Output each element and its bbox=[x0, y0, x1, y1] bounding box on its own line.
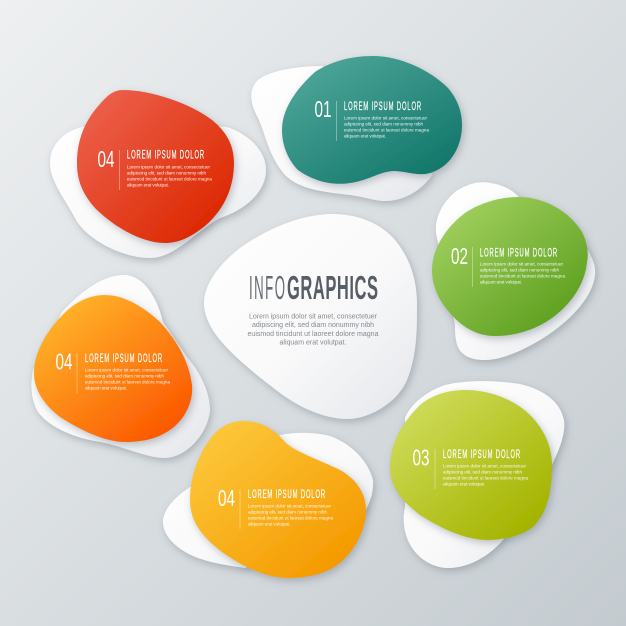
green backing blob bbox=[436, 182, 595, 360]
panel: step 04 yellow bbox=[163, 421, 373, 578]
number 04: 04 bbox=[98, 147, 114, 173]
yellow backing blob bbox=[163, 433, 373, 568]
lime blob bbox=[390, 390, 552, 540]
body text: euismod tincidunt ut laoreet dolore magna bbox=[85, 380, 170, 384]
panel: center title bbox=[204, 214, 417, 419]
panel: step 03 lime bbox=[390, 381, 564, 568]
body text: Lorem ipsum dolor sit amet, consectetuer bbox=[85, 368, 168, 372]
body text: adipiscing elit, sed diam nonummy nibh bbox=[443, 470, 522, 474]
body text bbox=[443, 464, 528, 486]
number 04: 04 bbox=[56, 349, 72, 375]
number 03: 03 bbox=[412, 445, 429, 471]
body text bbox=[344, 116, 429, 138]
title: GRAPHICS bbox=[287, 269, 378, 307]
body text: adipiscing elit, sed diam nonummy nibh bbox=[344, 122, 423, 126]
lime backing blob bbox=[404, 381, 564, 568]
body text: euismod tincidunt ut laoreet dolore magna bbox=[443, 476, 528, 480]
body text: euismod tincidunt ut laoreet dolore magna bbox=[344, 128, 429, 132]
body text: aliquam erat volutpat. bbox=[248, 522, 290, 526]
heading: LOREM IPSUM DOLOR bbox=[344, 100, 421, 114]
heading: LOREM IPSUM DOLOR bbox=[443, 448, 520, 462]
center body text: aliquam erat volutpat. bbox=[280, 340, 347, 346]
body text: adipiscing elit, sed diam nonummy nibh bbox=[85, 374, 164, 378]
body text: Lorem ipsum dolor sit amet, consectetuer bbox=[127, 164, 210, 170]
heading: LOREM IPSUM DOLOR bbox=[248, 488, 325, 502]
number 01: 01 bbox=[314, 97, 331, 123]
body text: aliquam erat volutpat. bbox=[480, 280, 522, 284]
body text bbox=[480, 262, 565, 284]
green blob bbox=[432, 197, 588, 336]
teal blob bbox=[282, 56, 462, 184]
orange backing blob bbox=[31, 275, 210, 458]
body text: Lorem ipsum dolor sit amet, consectetuer bbox=[443, 464, 526, 468]
red blob bbox=[77, 90, 234, 243]
body text bbox=[248, 504, 333, 526]
center body text: Lorem ipsum dolor sit amet, consectetuer bbox=[249, 314, 378, 320]
panel: step 02 green bbox=[432, 182, 595, 360]
number 04: 04 bbox=[218, 486, 235, 512]
title: INFO bbox=[249, 270, 285, 307]
teal backing blob bbox=[251, 66, 433, 201]
center body text: adipiscing elit, sed diam nonummy nibh bbox=[252, 322, 374, 329]
body text: adipiscing elit, sed diam nonummy nibh bbox=[248, 510, 327, 514]
red backing blob bbox=[50, 120, 266, 258]
panel: step 04 red bbox=[50, 90, 266, 258]
body text: euismod tincidunt ut laoreet dolore magna bbox=[127, 176, 212, 182]
body text: Lorem ipsum dolor sit amet, consectetuer bbox=[248, 504, 331, 508]
body text: aliquam erat volutpat. bbox=[85, 386, 127, 390]
body text bbox=[85, 368, 170, 390]
body text: Lorem ipsum dolor sit amet, consectetuer bbox=[480, 262, 563, 266]
center body text bbox=[248, 314, 379, 346]
heading: LOREM IPSUM DOLOR bbox=[127, 148, 204, 162]
body text: aliquam erat volutpat. bbox=[127, 182, 169, 188]
center white blob bbox=[204, 214, 417, 419]
body text: adipiscing elit, sed diam nonummy nibh bbox=[127, 170, 206, 176]
body text: aliquam erat volutpat. bbox=[344, 134, 386, 138]
yellow blob bbox=[190, 421, 366, 578]
heading: LOREM IPSUM DOLOR bbox=[85, 352, 162, 366]
orange blob bbox=[34, 295, 192, 442]
body text: euismod tincidunt ut laoreet dolore magna bbox=[248, 516, 333, 520]
heading: LOREM IPSUM DOLOR bbox=[480, 246, 557, 260]
body text: aliquam erat volutpat. bbox=[443, 482, 485, 486]
body text: euismod tincidunt ut laoreet dolore magna bbox=[480, 274, 565, 278]
panel: step 04 orange bbox=[31, 275, 210, 458]
center body text: euismod tincidunt ut laoreet dolore magna bbox=[248, 331, 379, 338]
body text: Lorem ipsum dolor sit amet, consectetuer bbox=[344, 116, 427, 120]
panel: step 01 teal bbox=[251, 56, 462, 201]
body text bbox=[127, 164, 212, 188]
number 02: 02 bbox=[451, 244, 468, 270]
body text: adipiscing elit, sed diam nonummy nibh bbox=[480, 268, 559, 272]
